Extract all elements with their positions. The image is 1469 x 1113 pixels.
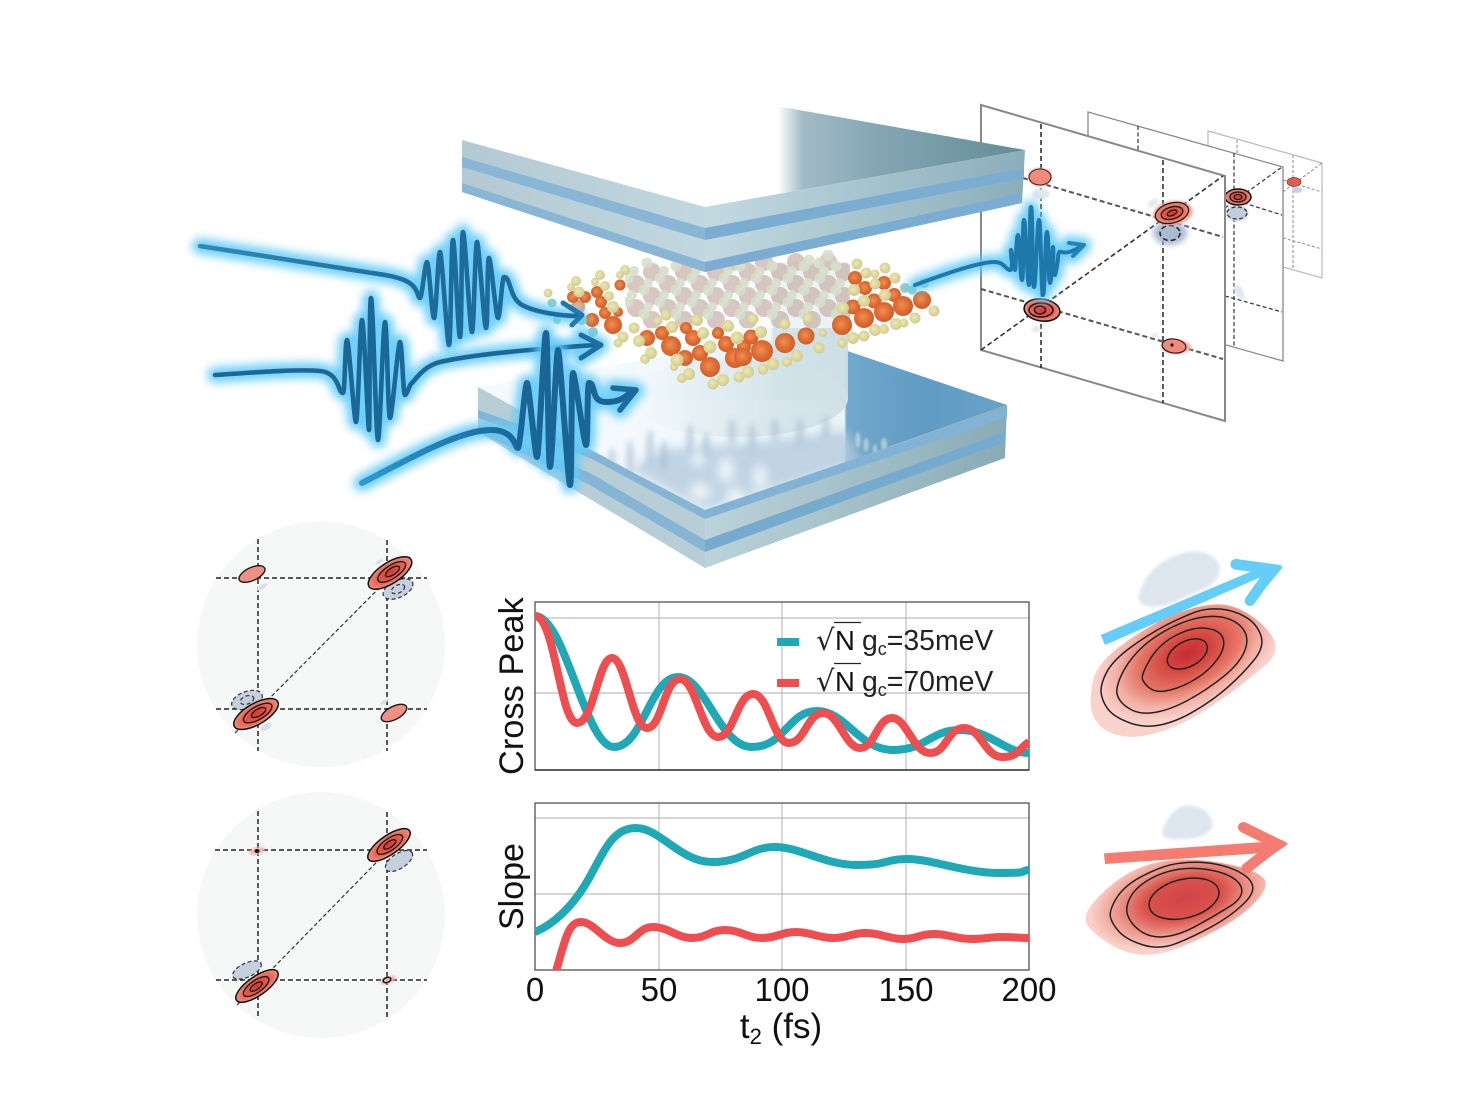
peak: lower left diagonal <box>229 692 283 736</box>
curve: 35 meV cross peak <box>535 616 1029 753</box>
top mirror <box>462 107 1025 272</box>
front atoms <box>633 310 824 390</box>
peak: blue, lower left <box>229 687 265 713</box>
arrow: blue slope <box>1101 564 1283 645</box>
legend entry: 35 meV: g <box>862 625 878 657</box>
circular 2D spectrum: lower <box>197 792 445 1038</box>
x axis tick labels: 0 <box>526 971 544 1008</box>
atomic monolayer lattice <box>544 258 940 390</box>
peak: blue, upper right <box>382 846 416 876</box>
legend entry: 35 meV: √ <box>816 623 835 657</box>
peak: faint lower right <box>379 974 397 986</box>
translucent sample column <box>625 262 848 437</box>
chart: slope vs time <box>493 803 1029 975</box>
legend entry: 70 meV: √ <box>816 664 835 698</box>
legend entry: 70 meV: g <box>862 666 878 698</box>
peak: lower left diagonal <box>231 964 283 1008</box>
laser pulse 1 <box>200 232 582 345</box>
x axis tick labels: 100 <box>754 971 810 1008</box>
curve: 35 meV slope <box>535 828 1029 932</box>
peak: lower right cross peak <box>1161 337 1191 355</box>
chart: cross peak vs time <box>493 596 1029 775</box>
legend entry: 70 meV: N <box>835 666 855 697</box>
peak: blue, upper right <box>380 575 416 603</box>
faded central atoms behind the column <box>622 250 853 329</box>
curve: 70 meV cross peak <box>535 616 1029 757</box>
spectrum panel: middle <box>1088 112 1283 361</box>
legend entry: 70 meV <box>777 664 993 700</box>
x axis tick labels: 200 <box>1001 971 1057 1008</box>
peak: upper right diagonal peak <box>1152 198 1194 245</box>
peak: upper left <box>237 562 267 586</box>
y axis label: Cross Peak: Cross Peak <box>493 596 531 775</box>
legend entry: 35 meV: N <box>835 625 855 656</box>
legend <box>777 622 993 700</box>
x axis title: 2 <box>750 1024 762 1049</box>
laser pulse 3 <box>362 333 636 485</box>
legend entry: 35 meV: =35meV <box>887 625 993 657</box>
legend entry: 70 meV: c <box>878 680 887 700</box>
legend entry: 35 meV <box>777 622 993 659</box>
arrow: red slope <box>1104 827 1288 868</box>
peak: upper right diagonal <box>363 551 417 595</box>
x axis tick labels: 150 <box>878 971 934 1008</box>
peak: upper left cross peak <box>1028 168 1052 186</box>
right atoms <box>819 258 940 348</box>
curve: 70 meV slope <box>555 922 1029 975</box>
zoomed peak: lower with red arrow <box>1086 805 1288 955</box>
peak: lower right <box>379 701 409 725</box>
peak: upper right diagonal <box>363 823 415 867</box>
peak: faint upper left <box>248 846 266 856</box>
x axis title: (fs) <box>762 1007 822 1046</box>
x axis tick labels <box>526 971 1057 1008</box>
spectrum panel: front <box>981 105 1225 421</box>
bottom mirror <box>478 262 1007 568</box>
laser pulse 4: emitted signal <box>915 207 1084 295</box>
laser pulse 2 <box>215 298 601 440</box>
zoomed peak: upper with blue arrow <box>1091 551 1283 737</box>
peak: blue, lower left <box>230 957 264 983</box>
2D spectrum stack <box>981 105 1322 421</box>
x axis tick labels: 50 <box>641 971 677 1008</box>
x axis title: t <box>740 1007 750 1046</box>
mirror reflection of the atoms <box>608 416 887 510</box>
legend entry: 35 meV: c <box>878 639 887 659</box>
peak: lower left diagonal peak <box>1023 297 1061 323</box>
y axis label: Slope: Slope <box>493 843 531 930</box>
circular 2D spectrum: upper <box>197 522 445 768</box>
spectrum panel: rear <box>1208 131 1322 278</box>
legend entry: 70 meV: =70meV <box>887 666 993 698</box>
left atoms <box>544 265 640 348</box>
